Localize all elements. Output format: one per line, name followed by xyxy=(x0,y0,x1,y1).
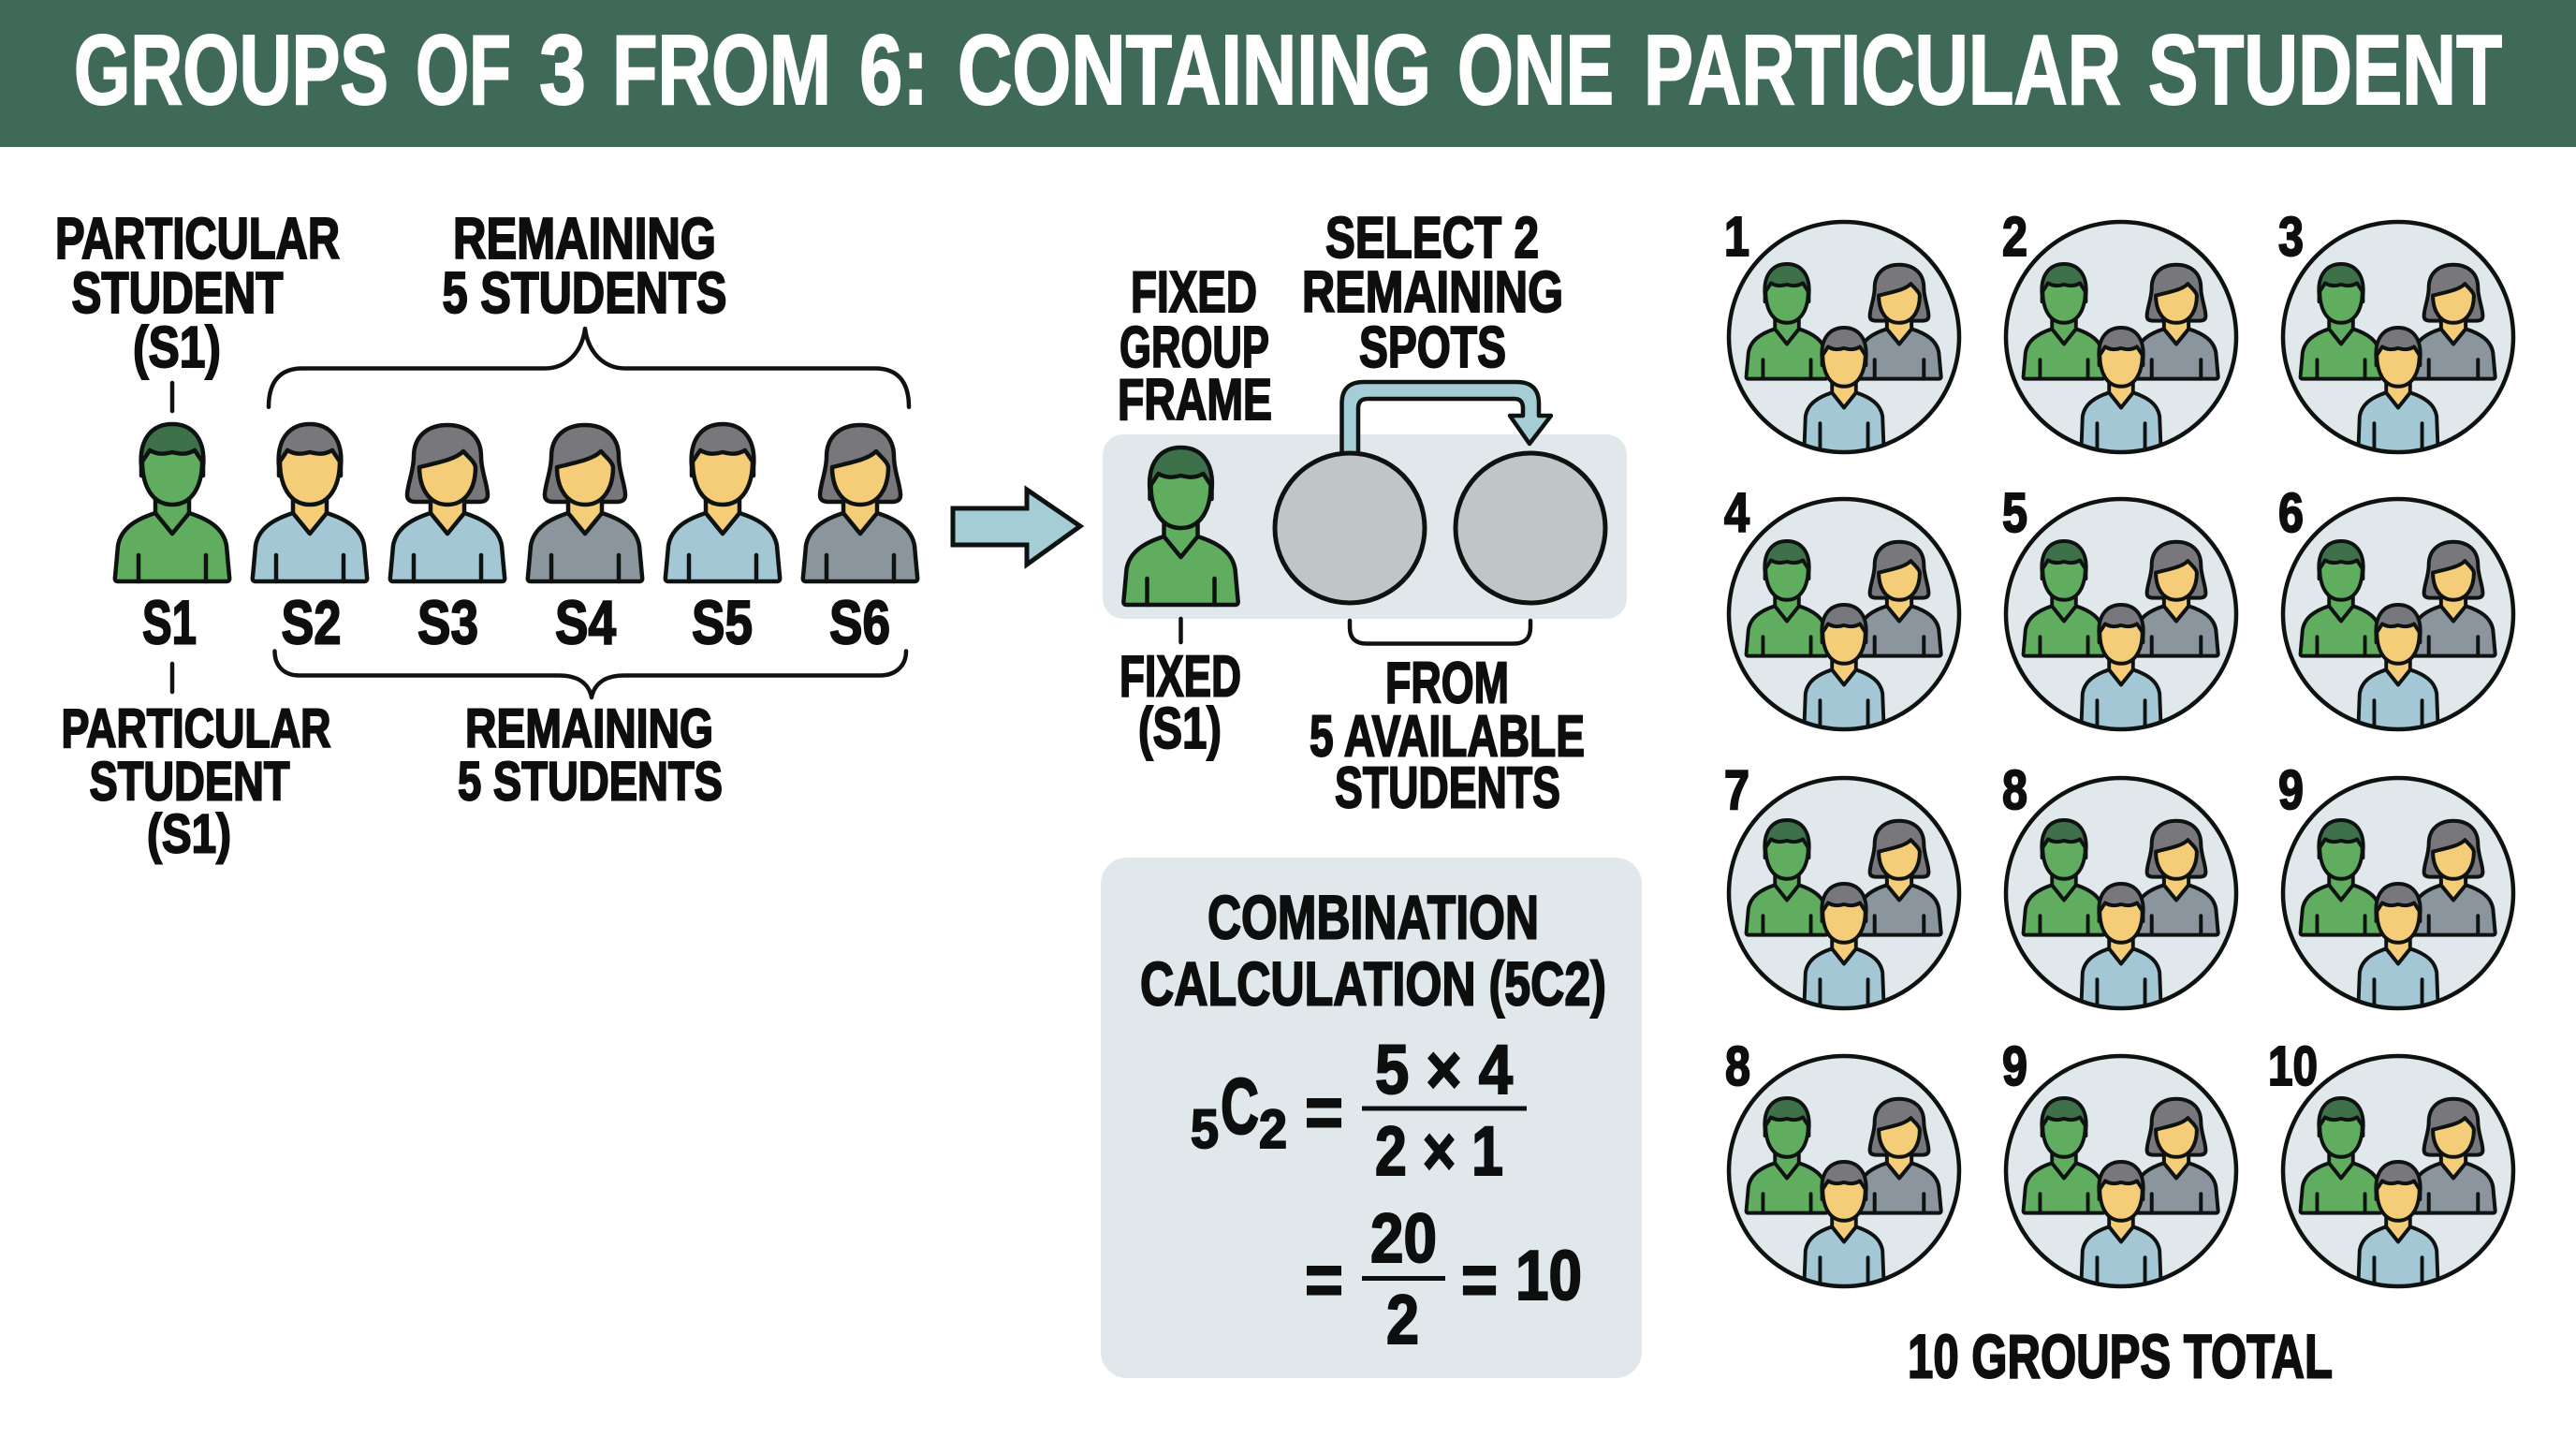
label: fixed group frame: FIXED xyxy=(1131,260,1257,325)
group icon 9 repeated xyxy=(2006,1056,2236,1302)
formula: 5C2 fraction: 2 × 1 xyxy=(1375,1112,1503,1190)
heading: combination calculation: CALCULATION (5C2) xyxy=(1140,949,1606,1019)
group numbers: 6 xyxy=(2278,482,2304,544)
label: particular student top: (S1) xyxy=(133,315,221,380)
formula: result: 2 xyxy=(1386,1281,1419,1358)
label: particular student bottom: PARTICULAR xyxy=(62,698,331,759)
arrow: to fixed group frame xyxy=(953,490,1080,565)
group numbers: 8 xyxy=(2002,759,2027,821)
group icon 8 xyxy=(2006,778,2236,1024)
group numbers: 4 xyxy=(1724,482,1749,544)
group numbers: 3 xyxy=(2278,206,2304,268)
label: fixed S1 xyxy=(1120,644,1241,761)
formula: 5C2 fraction xyxy=(1191,1031,1527,1190)
heading: combination calculation: COMBINATION xyxy=(1208,882,1539,951)
title xyxy=(74,15,2502,125)
group icon 3 xyxy=(2283,222,2513,468)
label: fixed group frame: GROUP xyxy=(1120,315,1269,380)
label: remaining 5 students top: REMAINING xyxy=(453,207,716,271)
label: select 2 remaining spots: SPOTS xyxy=(1359,315,1506,380)
group numbers: 5 xyxy=(2002,482,2027,544)
student labels S1 to S6 xyxy=(142,588,890,657)
formula: result: = xyxy=(1305,1238,1343,1320)
formula: result: = xyxy=(1461,1238,1498,1320)
label: select 2 remaining spots xyxy=(1302,206,1563,380)
formula: result xyxy=(1305,1199,1582,1358)
group numbers: 1 xyxy=(1724,206,1749,268)
title: FROM xyxy=(612,15,831,125)
label: select 2 remaining spots: SELECT 2 xyxy=(1325,206,1539,271)
group icon 8 repeated xyxy=(1729,1056,1959,1302)
student labels S1 to S6: S6 xyxy=(829,588,890,657)
icon: student S1 xyxy=(115,424,229,581)
title: CONTAINING xyxy=(958,15,1431,125)
student row xyxy=(115,424,917,581)
icon: student S4 xyxy=(528,425,642,581)
group icon 2 xyxy=(2006,222,2236,468)
group numbers: 10 xyxy=(2268,1035,2318,1097)
icon: fixed student S1 xyxy=(1123,448,1238,605)
label: remaining 5 students bottom xyxy=(458,698,723,813)
group icon 7 xyxy=(1729,778,1959,1024)
group numbers xyxy=(1724,206,2318,1097)
student labels S1 to S6: S2 xyxy=(281,588,341,657)
label: particular student top xyxy=(55,207,340,380)
icon: student S2 xyxy=(253,424,367,581)
label: from 5 available students: STUDENTS xyxy=(1335,756,1560,820)
formula: result: 10 xyxy=(1515,1236,1582,1314)
group icon 4 xyxy=(1729,499,1959,745)
formula: 5C2 fraction: 5 × 4 xyxy=(1375,1031,1513,1108)
group numbers: 7 xyxy=(1724,759,1749,821)
title: ONE xyxy=(1457,15,1614,125)
brace: under remaining students xyxy=(275,652,906,697)
icon: student S3 xyxy=(390,425,505,581)
label: remaining 5 students bottom: 5 STUDENTS xyxy=(458,751,723,813)
title: PARTICULAR xyxy=(1644,15,2121,125)
title: 6: xyxy=(859,15,929,125)
label: particular student bottom: (S1) xyxy=(147,803,231,865)
student labels S1 to S6: S5 xyxy=(692,588,753,657)
label: fixed group frame xyxy=(1118,260,1272,433)
label: from 5 available students: 5 AVAILABLE xyxy=(1310,704,1585,770)
brace: top over remaining students xyxy=(269,329,909,407)
label: select 2 remaining spots: REMAINING xyxy=(1302,260,1563,325)
spot: second empty circle xyxy=(1456,453,1605,603)
label: from 5 available students: FROM xyxy=(1385,652,1509,715)
label: fixed S1: (S1) xyxy=(1138,697,1222,761)
label: remaining 5 students top xyxy=(442,207,726,326)
label: fixed group frame: FRAME xyxy=(1118,368,1272,433)
panel: group frame xyxy=(1103,434,1627,619)
panel: combination calculation xyxy=(1101,858,1642,1378)
label: particular student bottom xyxy=(62,698,331,865)
group numbers: 8 xyxy=(1725,1035,1750,1097)
heading: combination calculation xyxy=(1140,882,1606,1019)
student labels S1 to S6: S4 xyxy=(555,588,616,657)
formula: 5C2 fraction: = xyxy=(1305,1071,1343,1153)
group icon 5 xyxy=(2006,499,2236,745)
group icon 6 xyxy=(2283,499,2513,745)
icon: student S6 xyxy=(803,425,917,581)
title: GROUPS xyxy=(74,15,388,125)
group numbers: 2 xyxy=(2002,206,2027,268)
bracket: under spots xyxy=(1350,621,1530,644)
group icon 10 xyxy=(2283,1056,2513,1302)
label: from 5 available students xyxy=(1310,652,1585,820)
formula: result: 20 xyxy=(1370,1199,1437,1277)
tick: S1 bottom xyxy=(170,664,174,692)
label: remaining 5 students bottom: REMAINING xyxy=(465,698,713,759)
icon: student S5 xyxy=(666,424,780,581)
group icon 1 xyxy=(1729,222,1959,468)
arrow: between spots xyxy=(1342,382,1551,459)
formula: 5C2 fraction: C xyxy=(1221,1062,1259,1150)
label: particular student top: PARTICULAR xyxy=(55,207,340,271)
tick: fixed xyxy=(1178,619,1183,642)
formula: 5C2 fraction: 2 xyxy=(1259,1099,1287,1160)
group icon 9 xyxy=(2283,778,2513,1024)
label: 10 groups total: 10 GROUPS TOTAL xyxy=(1908,1322,2333,1391)
label: fixed S1: FIXED xyxy=(1120,644,1241,710)
tick: S1 top xyxy=(170,383,174,411)
title banner xyxy=(0,0,2576,147)
group numbers: 9 xyxy=(2002,1035,2027,1097)
formula: 5C2 fraction: 5 xyxy=(1191,1099,1219,1160)
group numbers: 9 xyxy=(2278,759,2304,821)
student labels S1 to S6: S1 xyxy=(142,588,197,657)
title: 3 xyxy=(539,15,586,125)
group circles xyxy=(1729,222,2513,1302)
spot: first empty circle xyxy=(1275,453,1425,603)
label: particular student bottom: STUDENT xyxy=(90,751,290,813)
label: remaining 5 students top: 5 STUDENTS xyxy=(442,261,726,326)
student labels S1 to S6: S3 xyxy=(417,588,478,657)
label: particular student top: STUDENT xyxy=(71,261,284,326)
title: OF xyxy=(416,15,511,125)
